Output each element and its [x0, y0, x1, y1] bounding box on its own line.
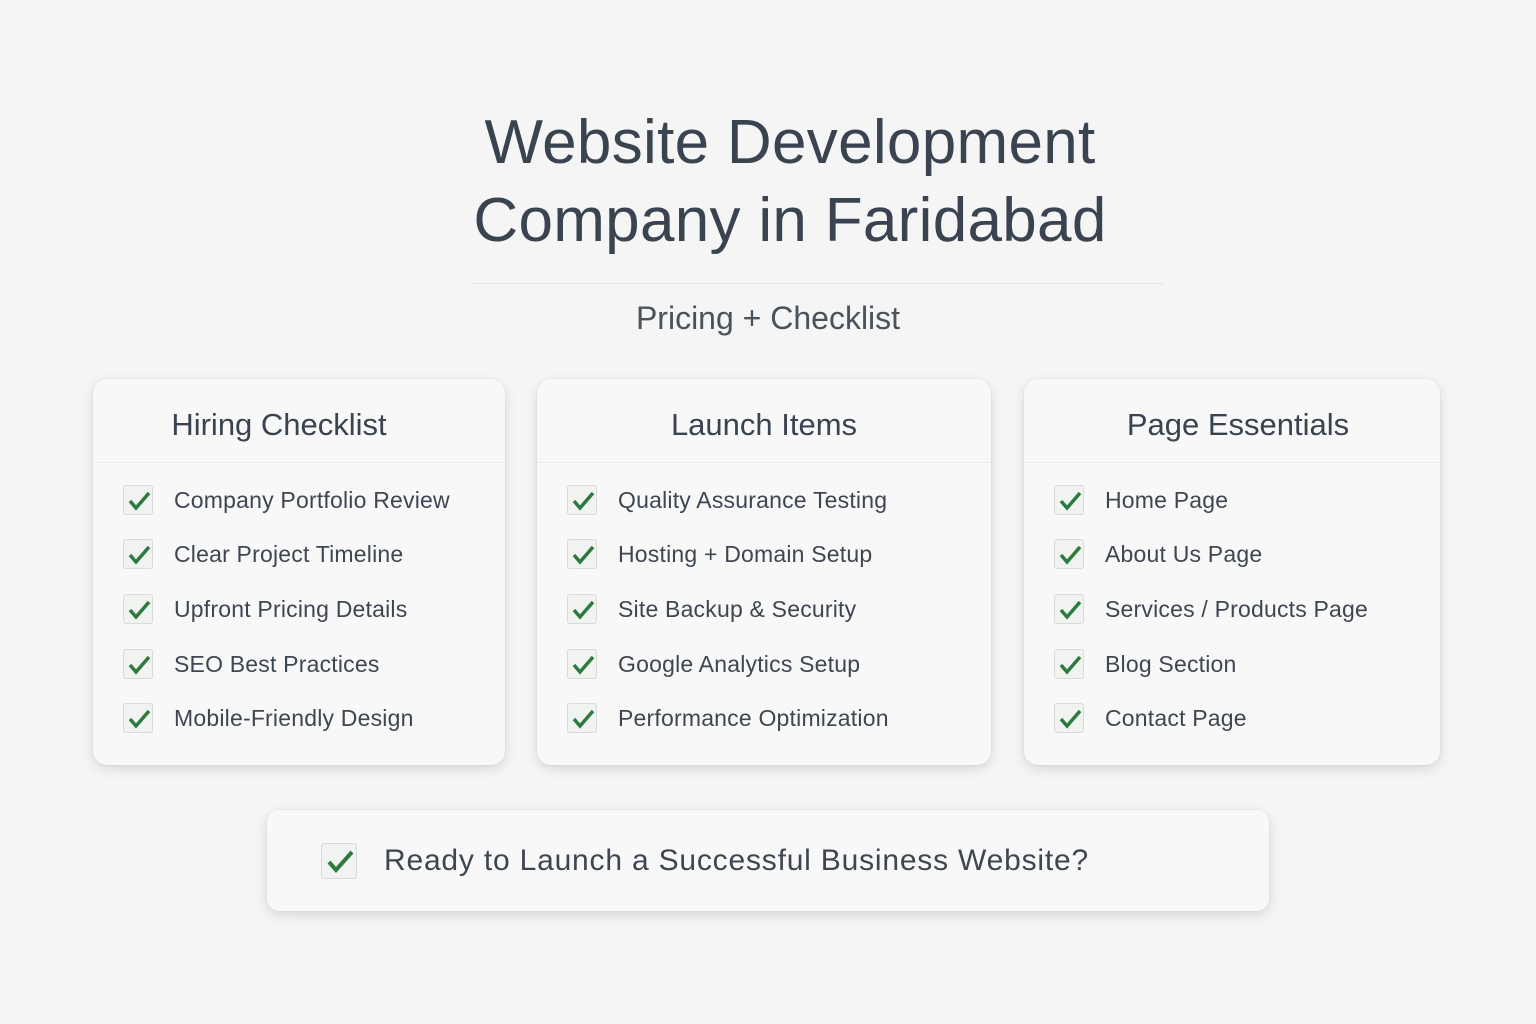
- callout text: Ready to Launch a Successful Business Website?: [384, 844, 1089, 877]
- item: [567, 594, 856, 624]
- panel: hiring checklist: Company Portfolio Review: [174, 487, 450, 513]
- panel: page essentials: Blog Section: [1105, 651, 1237, 677]
- item: [1054, 539, 1262, 569]
- title: [473, 108, 1107, 255]
- item: [1054, 649, 1237, 679]
- panel: page essentials: [1024, 379, 1440, 765]
- panel: launch items: Hosting + Domain Setup: [618, 541, 872, 567]
- panel: hiring checklist: Mobile-Friendly Design: [174, 705, 414, 731]
- panel: launch items: Site Backup & Security: [618, 596, 856, 622]
- panel: launch items: Google Analytics Setup: [618, 651, 860, 677]
- subtitle: Pricing + Checklist: [636, 300, 900, 336]
- item: [567, 485, 887, 515]
- item: [567, 539, 872, 569]
- item: [1054, 594, 1368, 624]
- callout: ready to launch: [267, 810, 1269, 911]
- title: Company in Faridabad: [473, 186, 1107, 255]
- title: Website Development: [484, 108, 1096, 177]
- icon: checkbox: [321, 843, 357, 879]
- heading: launch items: [537, 379, 991, 463]
- heading: hiring checklist: Hiring Checklist: [171, 407, 387, 442]
- panel: page essentials: Contact Page: [1105, 705, 1247, 731]
- heading: page essentials: Page Essentials: [1127, 407, 1349, 442]
- item: [1054, 703, 1247, 733]
- panel: hiring checklist: [93, 379, 505, 765]
- heading: launch items: Launch Items: [671, 407, 857, 442]
- item: [123, 485, 450, 515]
- item: [123, 703, 414, 733]
- panel: hiring checklist: Upfront Pricing Details: [174, 596, 407, 622]
- item: [123, 594, 407, 624]
- item: [123, 539, 403, 569]
- panel: page essentials: Services / Products Page: [1105, 596, 1368, 622]
- item: [1054, 485, 1228, 515]
- panel: launch items: Performance Optimization: [618, 705, 889, 731]
- panel: page essentials: About Us Page: [1105, 541, 1262, 567]
- item: [123, 649, 380, 679]
- panel: hiring checklist: SEO Best Practices: [174, 651, 380, 677]
- panel: hiring checklist: Clear Project Timeline: [174, 541, 403, 567]
- heading: page essentials: [1024, 379, 1440, 463]
- item: [567, 703, 889, 733]
- panel: page essentials: Home Page: [1105, 487, 1228, 513]
- panel: launch items: [537, 379, 991, 765]
- heading: hiring checklist: [93, 379, 505, 463]
- item: [567, 649, 860, 679]
- panel: launch items: Quality Assurance Testing: [618, 487, 887, 513]
